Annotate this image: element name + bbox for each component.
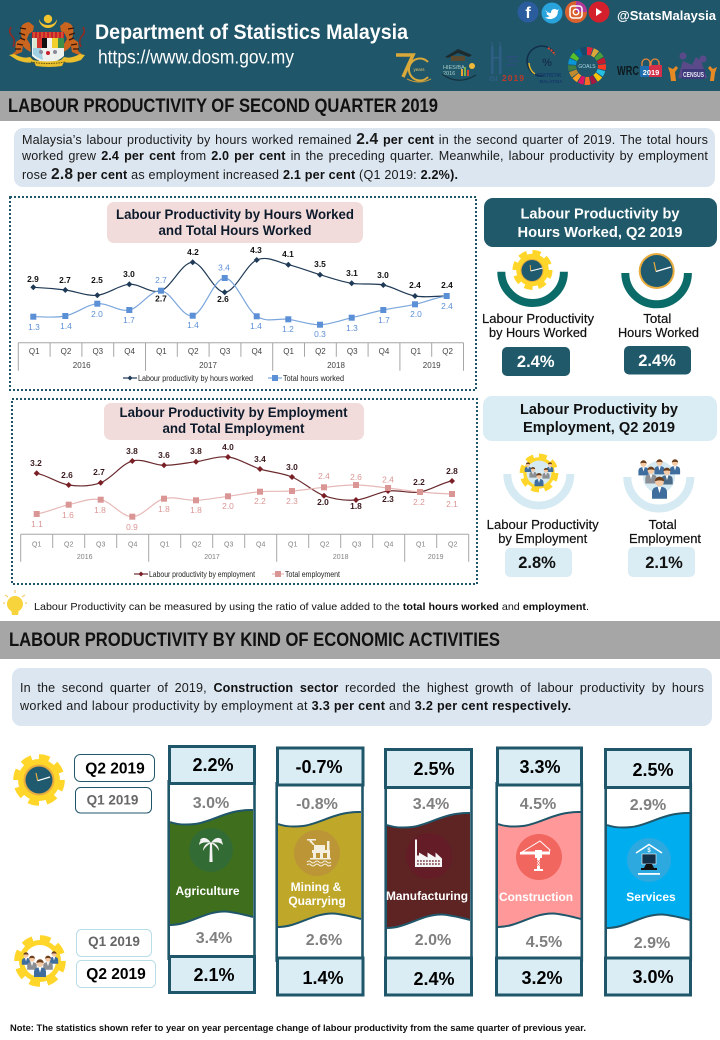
data labels: total employment: 1.6 bbox=[62, 510, 74, 520]
text block: summary paragraph: rose 2.8 per cent as employment increased 2.1 per cent (Q1 2019: 2.2%). bbox=[22, 166, 458, 183]
x axis: Q3 bbox=[224, 542, 233, 548]
data labels: productivity: 2.7 bbox=[59, 275, 71, 285]
label: labour productivity by employment: by Employment bbox=[498, 531, 588, 546]
data labels: total employment: 1.1 bbox=[31, 519, 43, 529]
icon: tower crane bbox=[516, 834, 562, 880]
data labels: total hours: 1.2 bbox=[282, 324, 294, 334]
x axis: Q2 bbox=[442, 347, 453, 356]
data labels: total hours: 1.4 bbox=[187, 320, 199, 330]
Q1 2019 hours value: 4.5% bbox=[520, 796, 556, 813]
data labels: total employment bbox=[31, 471, 458, 532]
data labels: productivity: 2.3 bbox=[382, 494, 394, 504]
Q2 2019 hours value: 2.5% bbox=[632, 760, 674, 780]
band bbox=[606, 783, 691, 961]
label: Quarrying bbox=[288, 894, 346, 908]
logo: ISI 2019: 2019 bbox=[502, 73, 524, 83]
icon: house and computer: $ bbox=[647, 848, 651, 854]
data labels: total employment: 1.8 bbox=[190, 505, 202, 515]
data labels: productivity: 2.6 bbox=[61, 470, 73, 480]
x axis: Q2 bbox=[448, 542, 457, 548]
logo: census: CENSUS bbox=[683, 72, 704, 79]
Q1 2019 employment value: 4.5% bbox=[526, 934, 562, 951]
Q2 2019 employment value: 2.4% bbox=[413, 969, 455, 989]
data labels: productivity: 1.8 bbox=[350, 501, 362, 511]
panel: hours worked chart bbox=[9, 196, 477, 391]
section heading 2: LABOUR PRODUCTIVITY BY KIND OF ECONOMIC ACTIVITIES bbox=[9, 630, 500, 651]
value: 2.4%: 2.4% bbox=[638, 352, 676, 370]
value: 2.1% bbox=[628, 547, 695, 577]
band bbox=[386, 783, 472, 961]
icon: light bulb bbox=[3, 590, 27, 615]
data labels: productivity: 2.9 bbox=[27, 274, 39, 284]
band bbox=[169, 780, 254, 960]
x axis bbox=[21, 534, 469, 562]
Q1 2019 employment value: 2.6% bbox=[306, 932, 342, 949]
panel heading: Labour Productivity by bbox=[520, 402, 678, 418]
data labels: productivity: 3.0 bbox=[123, 269, 135, 279]
data labels: productivity: 2.7 bbox=[93, 467, 105, 477]
data labels: total employment: 1.8 bbox=[158, 504, 170, 514]
label: total hours worked: Total bbox=[643, 311, 671, 326]
icon: gear clock with arc bbox=[501, 253, 564, 303]
logo: ISI 2019 bbox=[489, 42, 524, 83]
data labels: productivity: 2.8 bbox=[446, 466, 458, 476]
panel: employment chart bbox=[11, 398, 478, 585]
x axis: Q1 bbox=[410, 347, 422, 356]
data labels: total hours: 1.4 bbox=[250, 321, 262, 331]
icon: youtube bbox=[588, 2, 610, 22]
x axis: 2017 bbox=[204, 554, 220, 561]
logo: census bbox=[668, 52, 717, 81]
label: Agriculture bbox=[175, 884, 240, 898]
data labels: total hours: 1.7 bbox=[123, 315, 135, 325]
url: https://www.dosm.gov.my bbox=[98, 48, 294, 68]
data labels: productivity: 2.7 bbox=[155, 294, 167, 304]
text block: construction paragraph: In the second quarter of 2019, Construction sector recorded the highest growth of labour productivity by hours bbox=[20, 681, 704, 695]
chart title: Labour Productivity by Hours Worked bbox=[116, 207, 354, 222]
text block: construction paragraph: worked and labour productivity by employment at 3.3 per cent and 3.2 per cent respectively. bbox=[20, 699, 571, 713]
data labels: total hours: 3.4 bbox=[218, 262, 230, 272]
chart title bbox=[104, 403, 364, 440]
x axis: Q2 bbox=[192, 542, 201, 548]
title: Department of Statistics Malaysia: Department of Statistics Malaysia bbox=[95, 21, 408, 44]
label: Q2 2019: Q2 2019 bbox=[85, 760, 145, 778]
label: Q1 2019 bbox=[76, 930, 152, 956]
x axis: Q2 bbox=[315, 347, 326, 356]
label: Manufacturing bbox=[386, 889, 468, 903]
data labels: productivity: 4.2 bbox=[187, 247, 199, 257]
data labels: total employment: 2.6 bbox=[350, 472, 362, 482]
data labels: total employment: 2.0 bbox=[222, 501, 234, 511]
legend: Total employment bbox=[285, 570, 341, 579]
header banner bbox=[0, 0, 720, 91]
logo: percent ring: % bbox=[542, 57, 552, 69]
x axis bbox=[18, 343, 464, 371]
logo: 70 years bbox=[396, 55, 431, 82]
data labels: productivity: 3.6 bbox=[158, 450, 170, 460]
data labels: total hours: 1.7 bbox=[378, 315, 390, 325]
panel heading: Employment, Q2 2019 bbox=[523, 420, 675, 436]
logo: SDG label: GOALS bbox=[578, 64, 596, 70]
icon: facebook bbox=[518, 2, 538, 22]
Q2 2019 hours value bbox=[278, 748, 363, 785]
x axis: Q2 bbox=[188, 347, 199, 356]
data labels: productivity: 3.8 bbox=[126, 446, 138, 456]
value: 2.8%: 2.8% bbox=[518, 554, 556, 572]
data labels: total hours: 2.7 bbox=[155, 275, 167, 285]
x axis: 2016 bbox=[77, 554, 93, 561]
label: total hours worked: Hours Worked bbox=[618, 325, 699, 340]
section heading 2 bbox=[0, 621, 720, 659]
Q2 2019 hours value: 2.5% bbox=[413, 759, 455, 779]
Q2 2019 employment value bbox=[386, 958, 472, 995]
data labels: total employment: 1.8 bbox=[94, 505, 106, 515]
value: 2.4% bbox=[502, 347, 570, 376]
x axis: Q1 bbox=[29, 347, 40, 356]
legend bbox=[123, 374, 344, 383]
logo: household survey: 2016 bbox=[443, 71, 455, 77]
x axis: Q2 bbox=[320, 542, 329, 548]
note: measurement definition: Labour Productivity can be measured by using the ratio of value added to the total hours worked and employment. bbox=[34, 601, 589, 613]
panel heading: Hours Worked, Q2 2019 bbox=[518, 225, 682, 241]
Q1 2019 hours value: 3.0% bbox=[193, 795, 229, 812]
x axis: Q1 bbox=[32, 542, 41, 548]
chart title: and Total Employment bbox=[162, 421, 305, 436]
data labels: productivity: 2.2 bbox=[413, 477, 425, 487]
value: 2.1%: 2.1% bbox=[645, 554, 683, 572]
section heading 1 bbox=[0, 91, 720, 121]
x axis: Q4 bbox=[128, 542, 137, 548]
Q1 2019 employment value: 2.9% bbox=[634, 935, 670, 952]
text block: summary paragraph: worked grew 2.4 per cent from 2.0 per cent in the preceding quarter. Meanwhile, labour productivity by employment bbox=[22, 149, 708, 163]
text block: construction paragraph bbox=[12, 668, 712, 726]
label: labour productivity by hours worked: by Hours Worked bbox=[489, 325, 587, 340]
panel: hours worked summary bbox=[482, 198, 717, 376]
label: Q1 2019 bbox=[76, 788, 152, 813]
icon: factory bbox=[406, 833, 452, 879]
x axis: Q1 bbox=[288, 542, 297, 548]
label: labour productivity by hours worked bbox=[482, 311, 595, 340]
data labels: productivity: 2.0 bbox=[317, 497, 329, 507]
x axis: 2017 bbox=[199, 361, 217, 370]
line: labour productivity by employment bbox=[37, 457, 452, 500]
data labels: productivity: 3.5 bbox=[314, 259, 326, 269]
x axis: Q2 bbox=[64, 542, 73, 548]
icon: gear people with arc bbox=[507, 456, 570, 506]
label bbox=[288, 880, 346, 908]
x axis: 2016 bbox=[73, 361, 91, 370]
data labels: total hours: 2.4 bbox=[441, 301, 453, 311]
logo: percent ring: MALAYSIA bbox=[539, 79, 563, 84]
x axis: Q4 bbox=[256, 542, 265, 548]
Q2 2019 hours value: 3.3% bbox=[519, 757, 561, 777]
Q1 2019 hours value: 3.4% bbox=[413, 796, 449, 813]
value: 2.8% bbox=[505, 548, 572, 577]
panel heading bbox=[483, 396, 717, 441]
label: labour productivity by employment bbox=[487, 517, 599, 546]
label: labour productivity by hours worked: Labour Productivity bbox=[482, 311, 595, 326]
column: manufacturing bbox=[384, 748, 473, 996]
data labels: total employment: 2.3 bbox=[286, 496, 298, 506]
Q2 2019 employment value bbox=[278, 958, 363, 995]
logo: percent ring: STATISTIK bbox=[536, 73, 562, 79]
data labels: total hours: 0.3 bbox=[314, 329, 326, 339]
x axis: Q3 bbox=[352, 542, 361, 548]
logo: household survey bbox=[442, 49, 476, 80]
x axis: Q3 bbox=[220, 347, 231, 356]
data labels: productivity bbox=[30, 442, 458, 511]
x axis: Q4 bbox=[124, 347, 135, 356]
label: Q2 2019 bbox=[76, 960, 156, 988]
Q2 2019 hours value: -0.7% bbox=[295, 757, 343, 777]
label: total employment: Employment bbox=[629, 531, 701, 546]
label: Construction bbox=[499, 890, 573, 904]
value: 2.4% bbox=[624, 346, 691, 374]
legend: Labour productivity by employment bbox=[149, 570, 256, 579]
logo: ISI 2019: ISI bbox=[489, 76, 498, 83]
data labels: total hours: 1.3 bbox=[28, 322, 40, 332]
Q2 2019 employment value bbox=[606, 958, 690, 995]
data labels: productivity: 2.6 bbox=[217, 294, 229, 304]
x axis: Q4 bbox=[384, 542, 393, 548]
band bbox=[497, 782, 582, 962]
label: Services bbox=[626, 890, 676, 904]
label: labour productivity by employment: Labour Productivity bbox=[487, 517, 599, 532]
data labels: productivity: 3.0 bbox=[377, 270, 389, 280]
data labels: total hours: 1.4 bbox=[60, 321, 72, 331]
x axis: 2018 bbox=[327, 361, 345, 370]
section heading 1: LABOUR PRODUCTIVITY OF SECOND QUARTER 2019 bbox=[8, 96, 438, 117]
column: construction bbox=[495, 746, 584, 996]
legend: Total hours worked bbox=[283, 374, 344, 383]
social handle: @StatsMalaysia bbox=[617, 8, 717, 23]
x axis: Q1 bbox=[160, 542, 169, 548]
footnote: Note: The statistics shown refer to year on year percentage change of labour productivity from the same quarter of previous year. bbox=[10, 1023, 586, 1033]
chart title: Labour Productivity by Employment bbox=[120, 405, 348, 420]
text block: summary paragraph: Malaysia’s labour productivity by hours worked remained 2.4 per cent in the second quarter of 2019. The total hours bbox=[22, 131, 708, 148]
line: total hours worked bbox=[33, 278, 447, 325]
Q1 2019 employment value: 3.4% bbox=[196, 930, 232, 947]
x axis: 2018 bbox=[333, 554, 349, 561]
x axis: Q3 bbox=[92, 347, 104, 356]
data labels: total employment: 2.4 bbox=[382, 474, 394, 484]
Q2 2019 hours value bbox=[386, 750, 472, 788]
data labels: total employment: 2.2 bbox=[254, 496, 266, 506]
panel: employment summary bbox=[483, 396, 717, 577]
data labels: total employment: 2.1 bbox=[446, 499, 458, 509]
line: total employment bbox=[37, 485, 452, 517]
Q2 2019 hours value bbox=[498, 748, 582, 785]
column: agriculture bbox=[167, 745, 256, 994]
Q2 2019 employment value: 1.4% bbox=[302, 968, 344, 988]
x axis: Q4 bbox=[379, 347, 390, 356]
chart title: and Total Hours Worked bbox=[158, 223, 312, 238]
Q2 2019 hours value: 2.2% bbox=[192, 755, 234, 775]
label: total hours worked bbox=[618, 311, 699, 340]
x axis: Q2 bbox=[61, 347, 72, 356]
panel heading: Labour Productivity by bbox=[520, 206, 680, 222]
data labels: productivity: 4.1 bbox=[282, 249, 294, 259]
x axis: Q3 bbox=[347, 347, 358, 356]
Q2 2019 employment value bbox=[496, 958, 582, 995]
x axis: 2019 bbox=[423, 361, 441, 370]
x axis: Q1 bbox=[283, 347, 294, 356]
icon: instagram bbox=[565, 1, 587, 23]
x axis: Q3 bbox=[96, 542, 105, 548]
legend: employment bbox=[14, 929, 156, 988]
x axis: Q1 bbox=[416, 542, 425, 548]
label: Q2 2019: Q2 2019 bbox=[86, 966, 146, 983]
chart title bbox=[107, 202, 363, 243]
Q2 2019 employment value: 3.2% bbox=[521, 968, 563, 988]
label: total employment bbox=[629, 517, 701, 546]
icon: Malaysia coat of arms bbox=[9, 15, 85, 67]
Q2 2019 hours value bbox=[606, 750, 690, 788]
icon: palm tree bbox=[189, 828, 233, 872]
Q1 2019 hours value: -0.8% bbox=[296, 796, 338, 813]
data labels: total employment: 2.2 bbox=[413, 497, 425, 507]
logo: WRC 2019: WRC bbox=[617, 63, 639, 78]
logo: household survey: HIES/BA bbox=[443, 65, 465, 71]
data labels: productivity: 4.3 bbox=[250, 245, 262, 255]
Q1 2019 employment value: 2.0% bbox=[415, 932, 451, 949]
line: labour productivity by hours worked bbox=[33, 258, 447, 297]
label: Q1 2019: Q1 2019 bbox=[87, 792, 138, 808]
icon: people with arc bbox=[627, 459, 690, 508]
data labels: productivity: 4.0 bbox=[222, 442, 234, 452]
icon: facebook: f bbox=[525, 5, 531, 22]
x axis: 2019 bbox=[428, 554, 444, 561]
Q2 2019 employment value bbox=[170, 956, 254, 992]
data labels: productivity: 2.5 bbox=[91, 275, 103, 285]
data labels: productivity: 3.0 bbox=[286, 462, 298, 472]
logo: SDG wheel bbox=[572, 51, 602, 81]
Q1 2019 hours value: 2.9% bbox=[630, 797, 666, 814]
x axis: Q1 bbox=[156, 347, 167, 356]
icon: twitter bbox=[542, 2, 562, 24]
icon: house and computer bbox=[627, 838, 671, 882]
logo: WRC 2019: 2019 bbox=[643, 68, 659, 77]
data labels: productivity: 3.1 bbox=[346, 268, 358, 278]
label: Q2 2019 bbox=[74, 754, 154, 782]
value: 2.4%: 2.4% bbox=[517, 353, 555, 371]
icon: oil rig bbox=[294, 830, 340, 876]
legend: Labour productivity by hours worked bbox=[138, 374, 253, 383]
data labels: total hours: 2.0 bbox=[410, 309, 422, 319]
data labels: productivity: 3.8 bbox=[190, 446, 202, 456]
Q2 2019 hours value bbox=[170, 746, 254, 784]
icon: gear clock bbox=[17, 758, 61, 802]
Q2 2019 employment value: 3.0% bbox=[632, 967, 674, 987]
label: Mining & bbox=[291, 880, 342, 894]
data labels: total employment: 0.9 bbox=[126, 522, 138, 532]
logo: 70 years: years bbox=[413, 67, 425, 72]
logo: WRC 2019 bbox=[617, 59, 662, 78]
data labels: total hours: 2.0 bbox=[91, 309, 103, 319]
Q2 2019 employment value: 2.1% bbox=[193, 965, 235, 985]
data labels: total hours: 1.3 bbox=[346, 323, 358, 333]
label: Q1 2019: Q1 2019 bbox=[88, 934, 140, 949]
x axis: Q4 bbox=[251, 347, 263, 356]
column: mining and quarrying bbox=[275, 746, 364, 996]
text block: summary paragraph bbox=[14, 128, 715, 187]
icon: clock with arc bbox=[625, 253, 688, 304]
legend bbox=[134, 570, 341, 579]
panel heading bbox=[484, 198, 717, 247]
data labels: productivity: 2.4 bbox=[409, 280, 421, 290]
data labels: productivity: 3.2 bbox=[30, 458, 42, 468]
data labels: total hours bbox=[28, 262, 453, 339]
icon: gear people bbox=[18, 939, 62, 983]
legend: hours worked bbox=[13, 754, 155, 814]
data labels: total employment: 2.4 bbox=[318, 471, 330, 481]
data labels: productivity: 2.4 bbox=[441, 280, 453, 290]
logo: percent ring bbox=[527, 46, 563, 84]
band bbox=[277, 782, 362, 962]
label: total employment: Total bbox=[649, 517, 677, 532]
column: services bbox=[604, 748, 692, 996]
data labels: productivity bbox=[27, 245, 453, 304]
data labels: productivity: 3.4 bbox=[254, 454, 266, 464]
